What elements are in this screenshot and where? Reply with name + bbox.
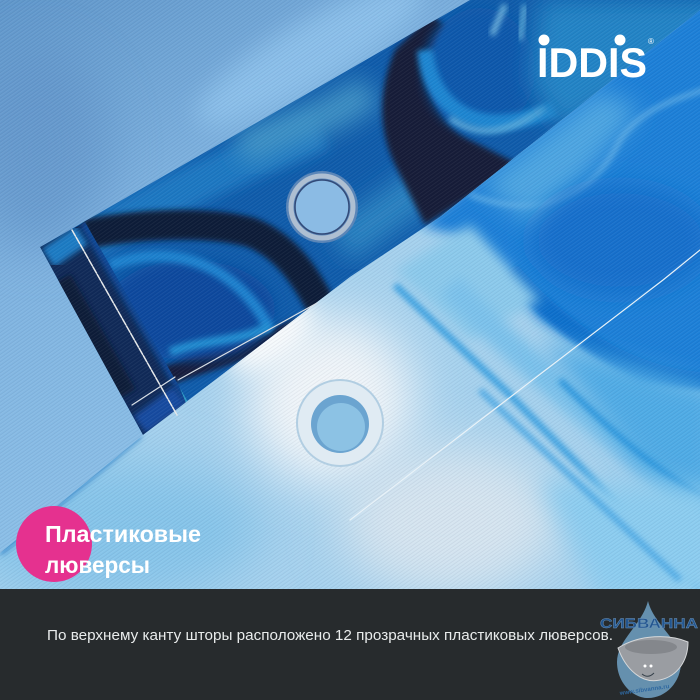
- stitching lines: [72, 230, 700, 520]
- hem swirl: light blue top: [90, 130, 320, 240]
- heading: [45, 521, 201, 578]
- body text: По верхнему канту шторы расположено 12 прозрачных пластиковых люверсов.: [47, 627, 613, 644]
- watermark: Sibvanna bathtub drop: www.sibvanna.ru: [618, 684, 670, 697]
- heading: люверсы: [45, 552, 150, 578]
- hem swirl: dark band: [85, 225, 322, 308]
- watermark: Sibvanna bathtub drop: СИБВАННА: [600, 615, 698, 631]
- lower fabric: strong blue top right: [420, 0, 700, 385]
- hem swirl: dark upper right column: [382, 15, 520, 225]
- lower fabric: bottom left cyan: [0, 460, 260, 600]
- panel: dark footer bar: [0, 589, 700, 700]
- hem swirl: inner blue: [105, 260, 275, 360]
- heading: Пластиковые: [45, 521, 201, 547]
- hem swirl: bright bowl: [417, 20, 461, 135]
- logo: IDDIS: ®: [648, 37, 654, 46]
- watermark: Sibvanna bathtub drop: [600, 601, 698, 698]
- panel: folded hem end: [40, 222, 190, 435]
- icon: pink circle: [16, 506, 92, 582]
- logo: IDDIS: IDDIS: [537, 39, 647, 86]
- panel: dark printed hem of the curtain: [40, 0, 700, 435]
- lower fabric: white centre: [245, 315, 415, 485]
- icon: upper grommet: [286, 171, 358, 243]
- lower fabric: diagonal streaks: [395, 225, 540, 340]
- icon: lower grommet: [297, 380, 383, 466]
